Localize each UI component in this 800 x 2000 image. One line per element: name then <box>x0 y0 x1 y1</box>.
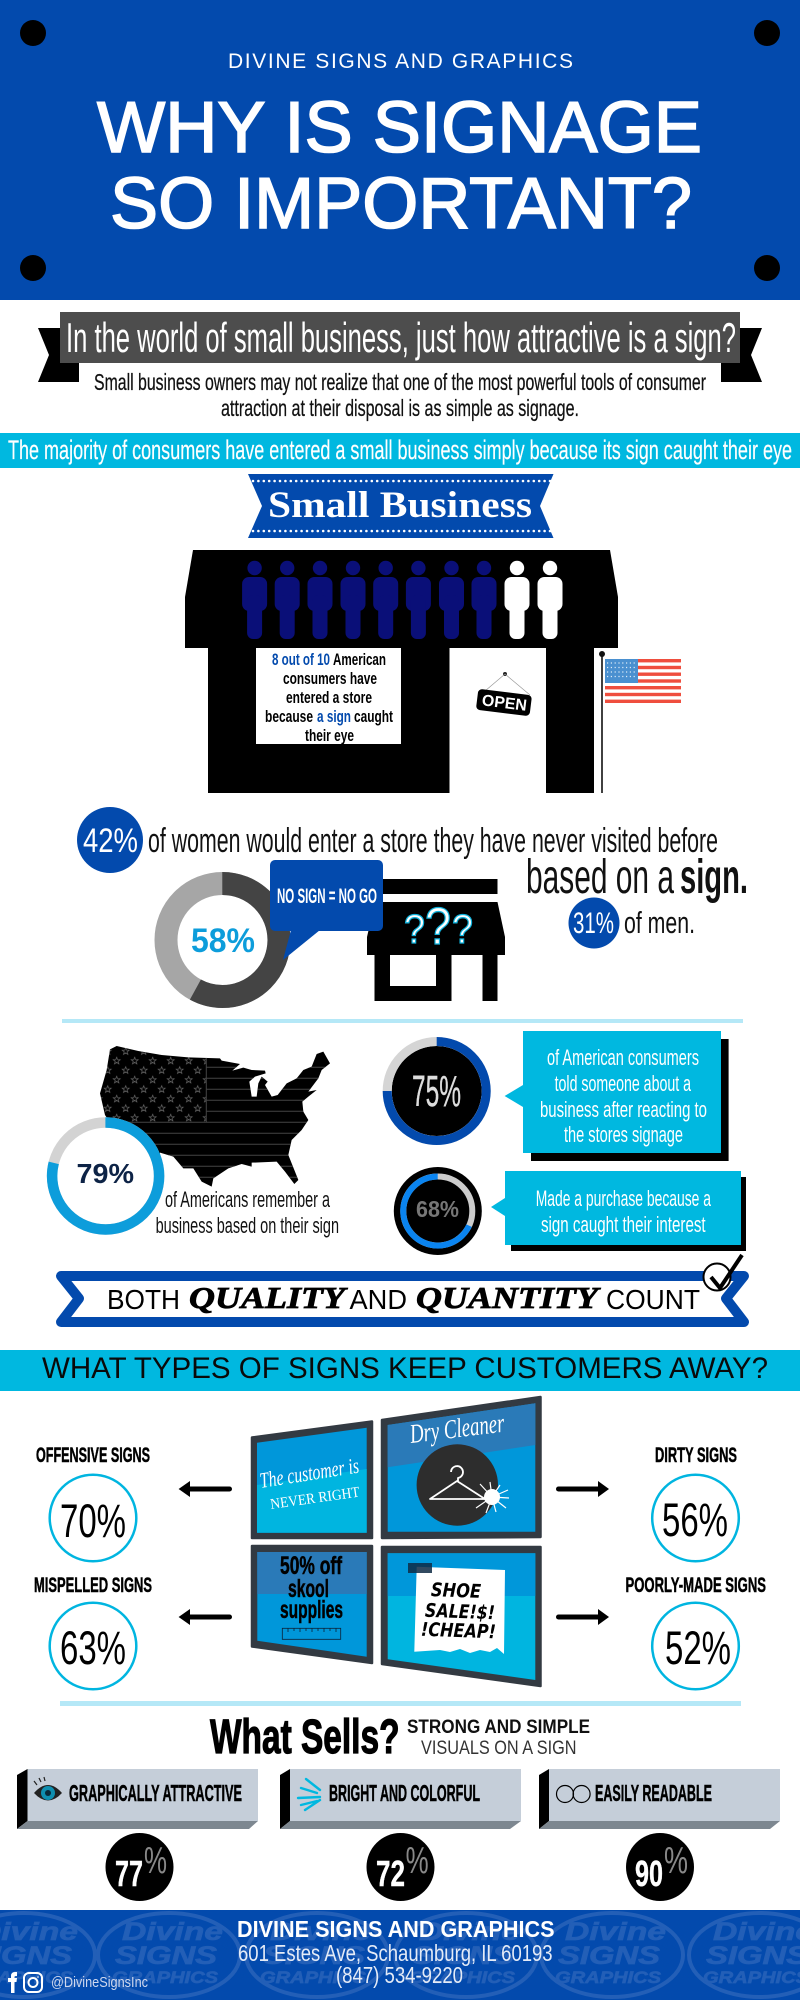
sign panel: offensive: NEVER RIGHT <box>269 1485 361 1513</box>
stat: 31% of men: of men. <box>624 905 695 940</box>
icon: splat <box>476 1482 509 1513</box>
ribbon: quality and quantity: QUANTITY <box>416 1280 602 1315</box>
stat: poorly-made signs <box>626 1574 766 1689</box>
sign panel: misspelled: skool <box>288 1575 329 1603</box>
stat: misspelled signs: 63% <box>60 1621 126 1674</box>
sign panel: misspelled: 50% off <box>280 1552 342 1580</box>
callout box: told someone: business after reacting to <box>540 1097 707 1122</box>
ring chart: 79%: 79% <box>76 1158 134 1189</box>
footer panel <box>0 1910 800 2000</box>
icon: small store with question marks: ? <box>425 898 451 956</box>
sign panel: poorly made: !CHEAP! <box>421 1619 496 1643</box>
header panel <box>0 0 800 300</box>
arrow: to poorly-made <box>556 1609 609 1625</box>
stat: 31% of men <box>568 898 695 948</box>
watermark logos: Divine <box>713 1918 800 1946</box>
watermark logos: SIGNS <box>115 1942 217 1970</box>
heading: what sells: VISUALS ON A SIGN <box>421 1738 576 1759</box>
stat: 72%: % <box>406 1840 429 1882</box>
icon: facebook <box>8 1972 17 1993</box>
stat: misspelled signs: MISPELLED SIGNS <box>34 1574 152 1597</box>
sign panel: dirty dry cleaner: Dry Cleaner <box>407 1408 506 1449</box>
intro text: attraction at their disposal is as simple as signage. <box>221 395 579 421</box>
text: 79% of americans: business based on their sign <box>156 1213 339 1238</box>
icon: bright rays <box>298 1779 320 1810</box>
callout box: told someone: the stores signage <box>564 1122 683 1147</box>
company name: DIVINE SIGNS AND GRAPHICS <box>228 50 573 73</box>
stat: 77% <box>106 1833 174 1901</box>
icon: glasses <box>556 1786 590 1802</box>
store window stat: caught <box>354 707 393 726</box>
people icons: 8 of 10 <box>242 561 562 639</box>
social handle: @DivineSignsInc <box>51 1974 148 1991</box>
stat: 77%: 77 <box>115 1853 143 1894</box>
panel: bright and colorful: BRIGHT AND COLORFUL <box>329 1780 480 1806</box>
ring chart: 75% <box>387 1042 486 1140</box>
ring chart: 68%: 68% <box>416 1196 459 1222</box>
watermark logos: SIGNS <box>558 1942 660 1970</box>
footer contact text: 601 Estes Ave, Schaumburg, IL 60193 <box>238 1940 553 1966</box>
stat: 72%: 72 <box>376 1853 405 1894</box>
heading: what sells: STRONG AND SIMPLE <box>407 1717 590 1738</box>
watermark logos: GRAPHICS <box>703 1968 800 1987</box>
ribbon: quality and quantity <box>61 1255 744 1322</box>
icon: american flag <box>599 651 681 793</box>
stat: 90%: 90 <box>635 1853 663 1894</box>
panel: graphically attractive <box>17 1769 258 1829</box>
title: SO IMPORTANT? <box>110 164 692 244</box>
store window stat: consumers have <box>283 669 377 688</box>
ribbon: quality and quantity: AND <box>350 1284 407 1315</box>
intro text <box>94 369 706 421</box>
panel: graphically attractive: GRAPHICALLY ATTRACTIVE <box>69 1780 242 1806</box>
watermark logos: SIGNS <box>263 1942 365 1970</box>
stat: poorly-made signs: 52% <box>665 1621 731 1674</box>
stat: 90%: % <box>664 1840 688 1882</box>
icon: hanger <box>430 1466 485 1499</box>
ring chart: 79% <box>52 1122 159 1230</box>
stat: 42% of women: sign. <box>680 851 748 904</box>
donut chart: 58%: 58% <box>191 922 255 960</box>
banner: small business <box>248 474 554 538</box>
icon: small store with question marks <box>367 879 505 1001</box>
callout: no sign no go <box>270 860 383 960</box>
store illustration <box>185 550 618 793</box>
sign panel: poorly made: SALE!$! <box>425 1600 495 1624</box>
stat: dirty signs <box>652 1444 739 1561</box>
sign panel: offensive <box>252 1422 372 1538</box>
text: 79% of americans: of Americans remember a <box>165 1187 330 1212</box>
callout box: told someone <box>505 1031 729 1161</box>
store window stat: entered a store <box>286 688 372 707</box>
store window stat: a sign <box>317 707 351 726</box>
watermark logos: SIGNS <box>412 1942 514 1970</box>
watermark logos: GRAPHICS <box>409 1968 516 1987</box>
ribbon: quality and quantity: QUALITY <box>189 1280 349 1315</box>
watermark logos: Divine <box>270 1918 371 1946</box>
sign panel: offensive: The customer is <box>258 1453 361 1493</box>
icon: open sign: OPEN <box>481 692 528 715</box>
watermark logos <box>0 1913 800 1997</box>
watermark logos: Divine <box>565 1918 666 1946</box>
arrow: to misspelled <box>179 1609 232 1625</box>
callout box: made a purchase: sign caught their interest <box>541 1212 706 1237</box>
stat: 42% of women: 42% <box>83 822 138 860</box>
callout box: told someone: of American consumers <box>547 1045 699 1070</box>
footer contact text: (847) 534-9220 <box>336 1962 463 1988</box>
store window stat <box>256 648 401 745</box>
icon: usa flag map <box>100 1046 340 1187</box>
stat: 42% of women <box>77 807 748 904</box>
ribbon: quality and quantity: BOTH <box>107 1284 180 1315</box>
sign panel: poorly made: SHOE <box>431 1579 481 1603</box>
icon: corner bolts <box>20 20 780 281</box>
text: 79% of americans <box>156 1187 339 1238</box>
watermark logos: GRAPHICS <box>112 1968 219 1987</box>
footer contact text: DIVINE SIGNS AND GRAPHICS <box>237 1916 555 1942</box>
store window stat: their eye <box>305 726 354 745</box>
callout box: made a purchase <box>491 1171 746 1251</box>
icon: small store with question marks: ? <box>404 906 425 952</box>
ribbon heading: attractive sign <box>38 312 762 382</box>
banner: small business: Small Business <box>268 485 532 526</box>
title <box>97 88 702 244</box>
paper note <box>414 1567 505 1654</box>
stat: offensive signs: OFFENSIVE SIGNS <box>36 1444 150 1467</box>
arrow: to dirty <box>556 1481 609 1497</box>
stat: 42% of women: based on a <box>526 851 674 904</box>
heading: what sells: What Sells? <box>210 1711 400 1764</box>
stat: offensive signs: 70% <box>60 1494 126 1547</box>
callout: no sign no go: NO SIGN = NO GO <box>277 885 377 908</box>
donut chart: 58% <box>166 884 279 996</box>
icon: open sign <box>476 672 532 716</box>
watermark logos: Divine <box>419 1918 520 1946</box>
icon: ruler <box>282 1628 341 1639</box>
sign panel: dirty dry cleaner <box>382 1397 540 1538</box>
ring chart: 75%: 75% <box>412 1067 461 1116</box>
stat: offensive signs <box>36 1444 150 1561</box>
store window stat: American <box>333 650 386 669</box>
watermark logos: Divine <box>122 1918 223 1946</box>
icon: check mark <box>704 1255 742 1290</box>
title: WHY IS SIGNAGE <box>97 88 702 168</box>
watermark logos: SIGNS <box>706 1942 800 1970</box>
panel: easily readable <box>539 1769 780 1829</box>
icon: small store with question marks: ? <box>452 906 473 952</box>
store window stat: because <box>265 707 313 726</box>
footer contact text <box>237 1916 555 1988</box>
stat: 90% <box>626 1833 694 1901</box>
stat: 77%: % <box>144 1840 167 1882</box>
ribbon: quality and quantity: COUNT <box>606 1284 700 1315</box>
arrow: to offensive <box>179 1481 232 1497</box>
store window stat: 8 out of 10 <box>272 650 330 669</box>
ring chart: 68% <box>392 1165 484 1257</box>
sign panel: misspelled <box>252 1546 372 1663</box>
stat: misspelled signs <box>34 1574 152 1689</box>
stat: dirty signs: DIRTY SIGNS <box>655 1444 737 1467</box>
icon: eye <box>34 1777 62 1800</box>
callout box: told someone: told someone about a <box>555 1071 691 1096</box>
stat: 31% of men: 31% <box>573 907 614 940</box>
sign panel: poorly made <box>382 1547 540 1686</box>
stat: 72% <box>366 1833 434 1901</box>
icon: instagram <box>24 1973 42 1992</box>
sign panel: misspelled: supplies <box>280 1596 343 1624</box>
stat: dirty signs: 56% <box>662 1493 728 1546</box>
watermark logos: GRAPHICS <box>260 1968 367 1987</box>
heading band: what types of signs: WHAT TYPES OF SIGNS KEEP CUSTOMERS AWAY? <box>42 1352 768 1385</box>
watermark logos: GRAPHICS <box>555 1968 662 1987</box>
panel: bright and colorful <box>280 1769 521 1829</box>
